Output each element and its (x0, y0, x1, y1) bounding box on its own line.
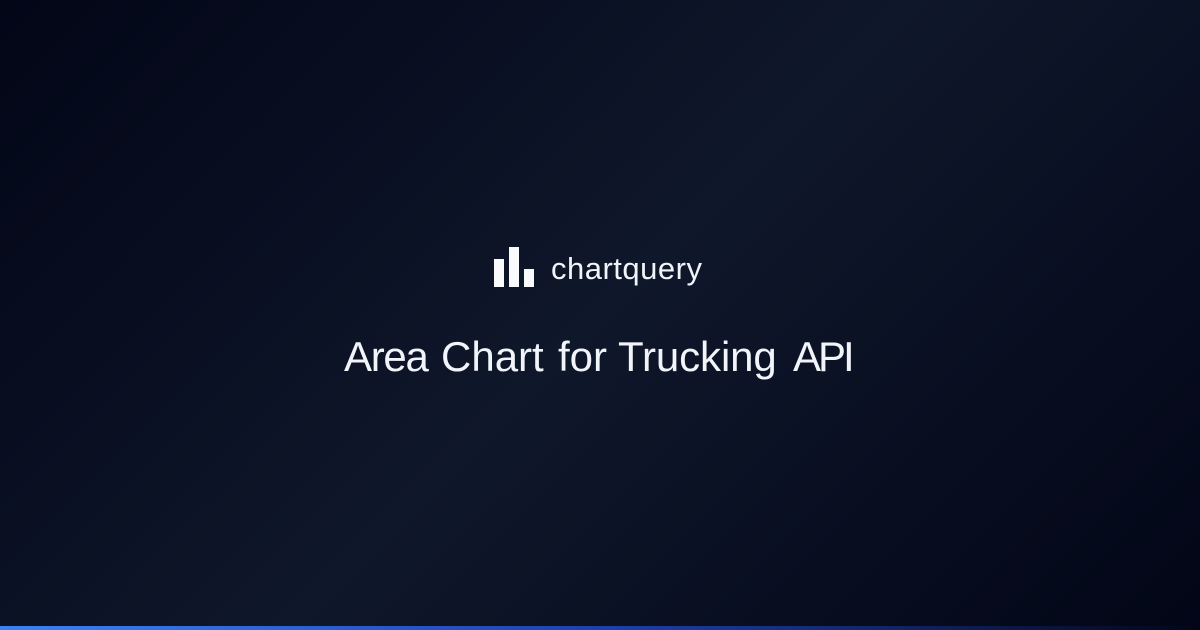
icon: bar chart logo (494, 247, 534, 287)
title: API (793, 333, 852, 380)
title (344, 333, 852, 380)
title: Trucking (618, 333, 777, 380)
title: for (558, 333, 607, 380)
title: Area (344, 333, 428, 380)
brand name: chartquery (551, 251, 702, 286)
title: Chart (441, 333, 544, 380)
accent bar (0, 626, 1200, 630)
